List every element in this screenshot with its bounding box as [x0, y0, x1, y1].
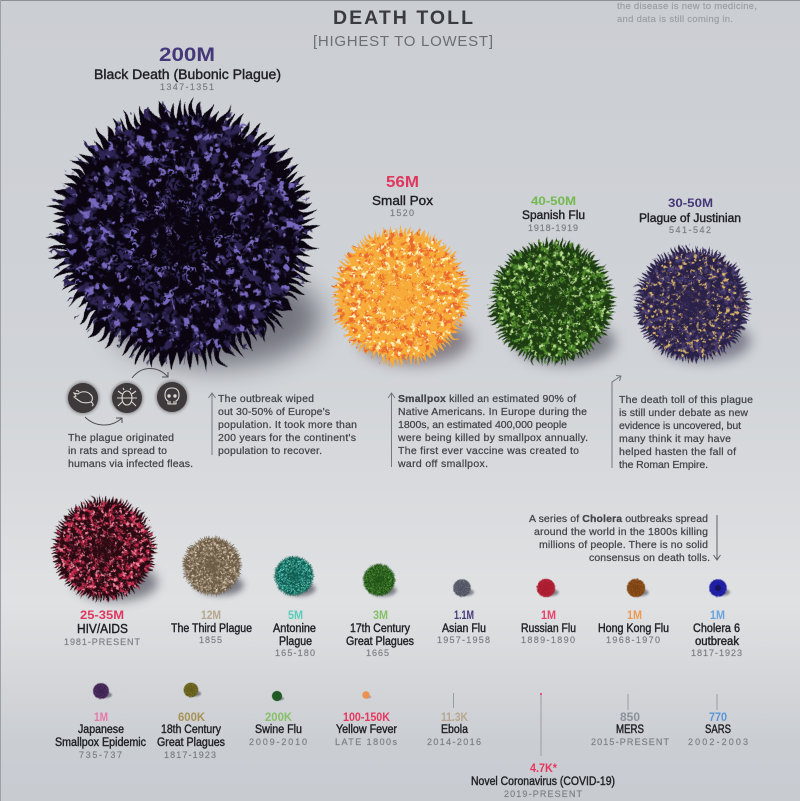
note: top right footnote: the disease is new to medicine, — [617, 1, 757, 12]
label: Novel Coronavirus — [471, 761, 615, 799]
label: Small Pox — [372, 174, 434, 218]
text: Justinian: is still under debate as new — [619, 407, 748, 419]
note: top right footnote: and data is still coming in. — [617, 14, 733, 25]
text: plague origin: humans via infected fleas. — [68, 458, 193, 470]
label: Spanish Flu: 40-50M — [531, 194, 576, 208]
text: smallpox: were being killed by smallpox annually. — [397, 432, 588, 444]
label: 18th Century Great Plagues: Great Plagues — [157, 737, 225, 749]
text: plague origin — [68, 432, 193, 470]
text: cholera: millions of people. There is no solid — [539, 539, 708, 551]
marker: Ebola line — [452, 693, 454, 708]
label: Small Pox: Small Pox — [372, 193, 434, 208]
label: Ebola: 11.3K — [441, 710, 468, 724]
arrow: cholera text — [714, 515, 720, 560]
marker: COVID-19 line — [540, 693, 542, 756]
label: Russian Flu: 1M — [541, 608, 556, 622]
label: Asian Flu — [437, 608, 491, 645]
label: Japanese Smallpox Epidemic: Smallpox Epidemic — [55, 737, 146, 749]
text: Justinian: the Roman Empire. — [619, 459, 708, 471]
label: Asian Flu: Asian Flu — [442, 623, 486, 635]
arrow: flea to human — [132, 368, 168, 378]
text: outbreak: out 30-50% of Europe's — [218, 406, 330, 418]
label: HIV/AIDS: HIV/AIDS — [77, 622, 128, 636]
text: smallpox: 1800s, an estimated 400,000 people — [398, 419, 567, 431]
note: top right footnote — [617, 1, 757, 25]
virus: Swine Flu sphere — [271, 690, 284, 702]
label: Yellow Fever: 100-150K — [343, 710, 390, 724]
label: Yellow Fever: LATE 1800s — [335, 737, 398, 747]
label: Asian Flu: 1.1M — [454, 608, 474, 622]
label: MERS: 2015-PRESENT — [591, 737, 670, 747]
label: Cholera 6 outbreak: 1M — [710, 608, 725, 622]
label: Novel Coronavirus: 2019-PRESENT — [504, 789, 583, 799]
label: Hong Kong Flu: Hong Kong Flu — [598, 623, 669, 635]
text: smallpox: ward off smallpox. — [397, 458, 488, 470]
text: Justinian — [619, 394, 753, 471]
virus: Antonine Plague sphere — [261, 543, 331, 613]
label: Cholera 6 outbreak: Cholera 6 — [693, 623, 740, 635]
label: 18th Century Great Plagues: 1817-1923 — [164, 750, 217, 760]
virus: Yellow Fever sphere — [361, 690, 371, 700]
label: Russian Flu: 1889-1890 — [521, 635, 576, 645]
label: The Third Plague — [171, 608, 252, 645]
label: The Third Plague: 1855 — [199, 635, 223, 645]
label: SARS — [688, 710, 749, 747]
label: Russian Flu: Russian Flu — [521, 623, 576, 635]
virus: Black Death sphere — [0, 24, 424, 467]
label: 17th Century Great Plagues: 1665 — [366, 648, 390, 658]
label: SARS: SARS — [705, 724, 731, 736]
label: Ebola: Ebola — [441, 724, 469, 736]
label: Swine Flu: 200K — [265, 710, 292, 724]
label: Plague of Justinian — [639, 196, 741, 235]
text: outbreak: population. It took more than — [218, 419, 357, 431]
label: Asian Flu: 1957-1958 — [437, 635, 491, 645]
text: outbreak: 200 years for the continent's — [218, 432, 356, 444]
text: smallpox: Native Americans. In Europe during the — [398, 406, 587, 418]
text: cholera: consensus on death tolls. — [589, 552, 710, 564]
label: Novel Coronavirus: 4.7K* — [530, 761, 557, 775]
label: MERS: 850 — [620, 710, 640, 724]
label: MERS: MERS — [616, 724, 644, 736]
label: Antonine Plague — [273, 608, 316, 658]
text: smallpox: Smallpox killed an estimated 90% of — [398, 393, 576, 405]
virus: Asian Flu sphere — [451, 577, 474, 599]
virus: Japanese Smallpox Epidemic sphere — [91, 681, 112, 701]
text: Justinian: helped hasten the fall of — [619, 446, 736, 458]
text: Justinian: many think it may have — [619, 433, 731, 445]
text: Justinian: The death toll of this plague — [619, 394, 753, 406]
title: death toll: DEATH TOLL — [333, 7, 473, 29]
marker: MERS line — [627, 694, 629, 710]
label: SARS: 770 — [709, 710, 727, 724]
label: The Third Plague: 12M — [201, 608, 221, 622]
text: cholera: A series of Cholera outbreaks spread — [529, 513, 708, 525]
text: plague origin: in rats and spread to — [68, 445, 167, 457]
label: Spanish Flu: Spanish Flu — [522, 210, 585, 222]
virus: Hong Kong Flu sphere — [625, 577, 649, 599]
label: 17th Century Great Plagues: 3M — [373, 608, 388, 622]
text: cholera: around the world in the 1800s killing — [534, 526, 708, 538]
virus: Plague of Justinian sphere — [607, 219, 780, 397]
virus: 17th Century Great Plagues sphere — [355, 556, 406, 605]
label: Spanish Flu: 1918-1919 — [528, 223, 579, 233]
label: Antonine Plague: 5M — [288, 608, 303, 622]
label: Black Death — [94, 45, 281, 92]
icon: rat — [67, 382, 99, 414]
label: Spanish Flu — [522, 194, 585, 233]
label: Black Death: 200M — [159, 45, 215, 66]
label: Antonine Plague: Antonine — [273, 623, 316, 635]
text: outbreak: The outbreak wiped — [218, 393, 314, 405]
label: 17th Century Great Plagues: 17th Century — [350, 623, 410, 635]
label: Plague of Justinian: Plague of Justinian — [639, 213, 741, 225]
text: plague origin: The plague originated — [68, 432, 174, 444]
label: Novel Coronavirus: Novel Coronavirus (COVID-19) — [471, 776, 615, 788]
label: Japanese Smallpox Epidemic: 1M — [94, 710, 108, 724]
label: Black Death: Black Death (Bubonic Plague) — [94, 67, 281, 82]
label: Hong Kong Flu: 1968-1970 — [606, 635, 661, 645]
label: Japanese Smallpox Epidemic — [55, 710, 146, 760]
text: Justinian: evidence is uncovered, but — [619, 420, 741, 432]
virus: Russian Flu sphere — [535, 577, 559, 599]
label: Plague of Justinian: 30-50M — [668, 196, 713, 210]
title: death toll: [HIGHEST TO LOWEST] — [313, 33, 493, 50]
arrow: rat to flea — [85, 417, 122, 425]
label: 18th Century Great Plagues — [157, 710, 225, 760]
label: Yellow Fever — [335, 710, 398, 747]
label: Plague of Justinian: 541-542 — [669, 225, 712, 235]
title: death toll — [313, 7, 493, 50]
virus: Spanish Flu sphere — [460, 210, 647, 402]
icon: skull — [156, 381, 188, 413]
label: Yellow Fever: Yellow Fever — [336, 724, 397, 736]
label: Small Pox: 56M — [386, 174, 419, 191]
label: Ebola — [427, 710, 482, 747]
arrow: smallpox text — [388, 393, 395, 467]
label: SARS: 2002-2003 — [688, 737, 749, 747]
label: HIV/AIDS — [64, 608, 141, 647]
label: Hong Kong Flu: 1M — [627, 608, 642, 622]
virus: Cholera 6 sphere — [707, 577, 730, 599]
label: Japanese Smallpox Epidemic: 735-737 — [79, 750, 123, 760]
virus: Small Pox sphere — [322, 217, 480, 375]
label: MERS — [591, 710, 670, 747]
text: smallpox: The first ever vaccine was created to — [398, 445, 579, 457]
label: Japanese Smallpox Epidemic: Japanese — [78, 724, 124, 736]
label: Antonine Plague: Plague — [279, 636, 312, 648]
label: Swine Flu: 2009-2010 — [249, 737, 308, 747]
label: Cholera 6 outbreak — [691, 608, 743, 658]
label: Swine Flu — [249, 710, 308, 747]
label: Russian Flu — [521, 608, 576, 645]
label: HIV/AIDS: 25-35M — [80, 608, 124, 622]
text: outbreak — [218, 393, 357, 457]
label: Cholera 6 outbreak: 1817-1923 — [691, 648, 743, 658]
label: Black Death: 1347-1351 — [160, 82, 215, 92]
text: outbreak: population to recover. — [218, 445, 322, 457]
label: The Third Plague: The Third Plague — [171, 623, 252, 635]
label: 17th Century Great Plagues — [346, 608, 414, 658]
label: 18th Century Great Plagues: 18th Century — [161, 724, 221, 736]
label: Hong Kong Flu — [598, 608, 669, 645]
label: HIV/AIDS: 1981-PRESENT — [64, 637, 141, 647]
label: Small Pox: 1520 — [390, 208, 415, 218]
virus: 18th Century Great Plagues sphere — [182, 681, 201, 699]
virus: HIV/AIDS sphere — [20, 465, 199, 643]
marker: SARS line — [716, 694, 718, 710]
label: Cholera 6 outbreak: outbreak — [695, 636, 739, 648]
arrow: outbreak text — [208, 393, 216, 455]
label: 17th Century Great Plagues: Great Plagues — [346, 636, 414, 648]
label: 18th Century Great Plagues: 600K — [178, 710, 205, 724]
arrow: Justinian text — [612, 376, 621, 468]
text: smallpox — [397, 393, 588, 470]
label: Ebola: 2014-2016 — [427, 737, 482, 747]
label: Swine Flu: Swine Flu — [255, 724, 302, 736]
text: cholera — [529, 513, 710, 564]
virus: Third Plague sphere — [165, 519, 266, 617]
icon: flea — [111, 382, 143, 414]
label: Antonine Plague: 165-180 — [275, 648, 316, 658]
